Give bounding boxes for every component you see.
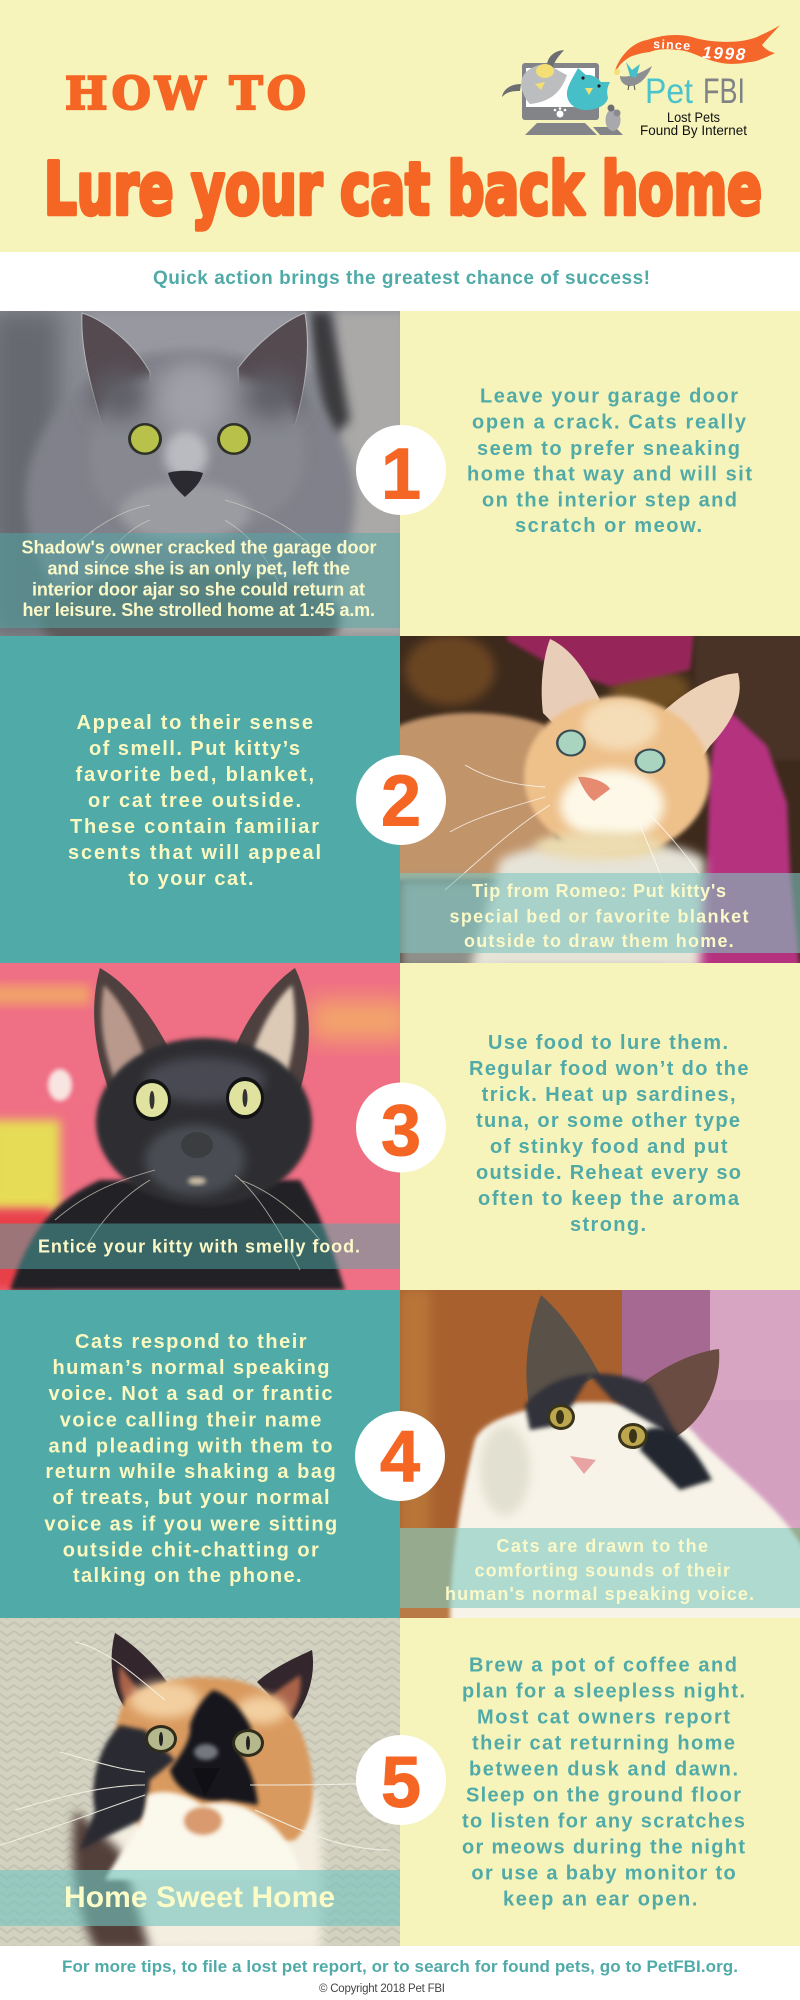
number badge 3: 3 (381, 1091, 421, 1171)
text panel (0, 636, 400, 963)
logo mouse (606, 104, 620, 131)
body text: often to keep the aroma (478, 1188, 740, 1210)
panel: step 1 (0, 311, 800, 670)
text panel (400, 311, 800, 636)
body text: outside chit-chatting or (63, 1539, 319, 1561)
body text: to listen for any scratches (462, 1811, 745, 1833)
body text: strong. (570, 1214, 646, 1236)
logo gray dog (502, 50, 567, 104)
caption text: Home Sweet Home (64, 1881, 335, 1914)
panel: step 4 (0, 1290, 800, 1625)
logo wordmark: Lost Pets (667, 109, 720, 125)
caption text: special bed or favorite blanket (450, 906, 748, 926)
body text: favorite bed, blanket, (76, 764, 314, 786)
body text: or cat tree outside. (88, 790, 301, 812)
body text: Sleep on the ground floor (466, 1785, 741, 1807)
body text (469, 1032, 748, 1236)
body text: tuna, or some other type (476, 1110, 740, 1132)
body text: Regular food won’t do the (469, 1058, 748, 1080)
caption text: human's normal speaking voice. (445, 1584, 754, 1604)
body text: of treats, but your normal (52, 1487, 330, 1509)
caption text: and since she is an only pet, left the (48, 558, 350, 578)
body text: or use a baby monitor to (471, 1863, 736, 1885)
logo banner: 1998 (702, 43, 746, 64)
number badge 5 (356, 1735, 446, 1825)
panel: step 5 (0, 1618, 800, 1950)
photo: white and black cat (400, 1290, 800, 1625)
logo wordmark: FBI (703, 72, 745, 111)
photo: gray cat (0, 311, 400, 636)
text panel (0, 1290, 400, 1618)
photo: calico cat (0, 1618, 400, 1950)
body text: These contain familiar (70, 816, 319, 838)
body text: Cats respond to their (75, 1331, 307, 1353)
ears (82, 313, 307, 425)
logo banner (615, 25, 780, 70)
body text: return while shaking a bag (45, 1461, 336, 1483)
body text: open a crack. Cats really (472, 412, 747, 434)
body text: voice calling their name (60, 1409, 321, 1431)
footer (62, 1957, 738, 1995)
caption text: her leisure. She strolled home at 1:45 a.m. (22, 600, 375, 620)
body text: seem to prefer sneaking (477, 438, 740, 460)
caption text (445, 1536, 754, 1604)
number badge 3 (356, 1082, 446, 1172)
logo teal cat (567, 68, 610, 110)
body text: Appeal to their sense (76, 712, 313, 734)
panel: step 2 (0, 630, 800, 970)
caption text: Entice your kitty with smelly food. (38, 1236, 360, 1256)
body text: Use food to lure them. (488, 1032, 728, 1054)
logo computer (522, 63, 623, 135)
caption band (400, 1528, 800, 1608)
body text: Leave your garage door (480, 386, 738, 408)
body text: and pleading with them to (48, 1435, 332, 1457)
photo: black cat (0, 963, 410, 1290)
number badge 4 (355, 1411, 445, 1501)
caption text (22, 537, 376, 620)
body text (467, 386, 752, 537)
subheading: Quick action brings the greatest chance of success! (153, 268, 650, 289)
logo wordmark: Found By Internet (640, 122, 747, 138)
logo banner: since (653, 37, 691, 53)
body text (44, 1331, 337, 1587)
body text: outside. Reheat every so (476, 1162, 741, 1184)
body text: scents that will appeal (68, 842, 321, 864)
number badge 1 (356, 425, 446, 515)
caption band (0, 533, 400, 628)
caption text: Cats are drawn to the (496, 1536, 708, 1556)
body text: voice. Not a sad or frantic (48, 1383, 332, 1405)
body text (68, 712, 321, 890)
body text: Brew a pot of coffee and (469, 1655, 737, 1677)
body text: trick. Heat up sardines, (482, 1084, 736, 1106)
body text (462, 1655, 745, 1911)
caption text: comforting sounds of their (474, 1561, 730, 1581)
number badge 1: 1 (381, 434, 421, 514)
body text: their cat returning home (472, 1733, 735, 1755)
body text: of stinky food and put (490, 1136, 728, 1158)
body text: on the interior step and (482, 490, 737, 512)
photo: orange cat (390, 630, 800, 970)
body text: Most cat owners report (477, 1707, 730, 1729)
logo wordmark: Pet (645, 72, 693, 111)
panel: step 3 (0, 963, 800, 1290)
body text: human’s normal speaking (52, 1357, 330, 1379)
body text: to your cat. (128, 868, 254, 890)
header panel (0, 0, 800, 252)
caption text: outside to draw them home. (464, 931, 734, 951)
body text: scratch or meow. (515, 515, 702, 537)
body text: talking on the phone. (73, 1565, 302, 1587)
text panel (400, 963, 800, 1290)
body text: keep an ear open. (503, 1889, 697, 1911)
caption text: Shadow's owner cracked the garage door (22, 537, 376, 557)
caption band (0, 1224, 400, 1269)
body text: or meows during the night (462, 1837, 745, 1859)
number badge 5: 5 (381, 1743, 421, 1823)
body text: plan for a sleepless night. (462, 1681, 745, 1703)
logo bird (614, 62, 652, 90)
number badge 2: 2 (381, 762, 421, 842)
caption text: Tip from Romeo: Put kitty's (472, 881, 726, 901)
heading: how to: HOW TO (65, 67, 306, 120)
number badge 4: 4 (380, 1417, 420, 1497)
caption text (450, 881, 748, 951)
number badge 2 (356, 755, 446, 845)
body text: of smell. Put kitty’s (89, 738, 300, 760)
text panel (400, 1618, 800, 1946)
logo wordmark (640, 72, 747, 138)
footer link text: For more tips, to file a lost pet report, or to search for found pets, go to PetFBI.org. (62, 1957, 738, 1976)
body text: voice as if you were sitting (44, 1513, 337, 1535)
caption band (0, 1870, 400, 1926)
body text: between dusk and dawn. (469, 1759, 738, 1781)
copyright: © Copyright 2018 Pet FBI (319, 1983, 445, 1995)
caption text: interior door ajar so she could return at (32, 579, 365, 599)
body text: home that way and will sit (467, 464, 752, 486)
logo: Pet FBI (502, 25, 780, 138)
caption band (400, 873, 800, 953)
